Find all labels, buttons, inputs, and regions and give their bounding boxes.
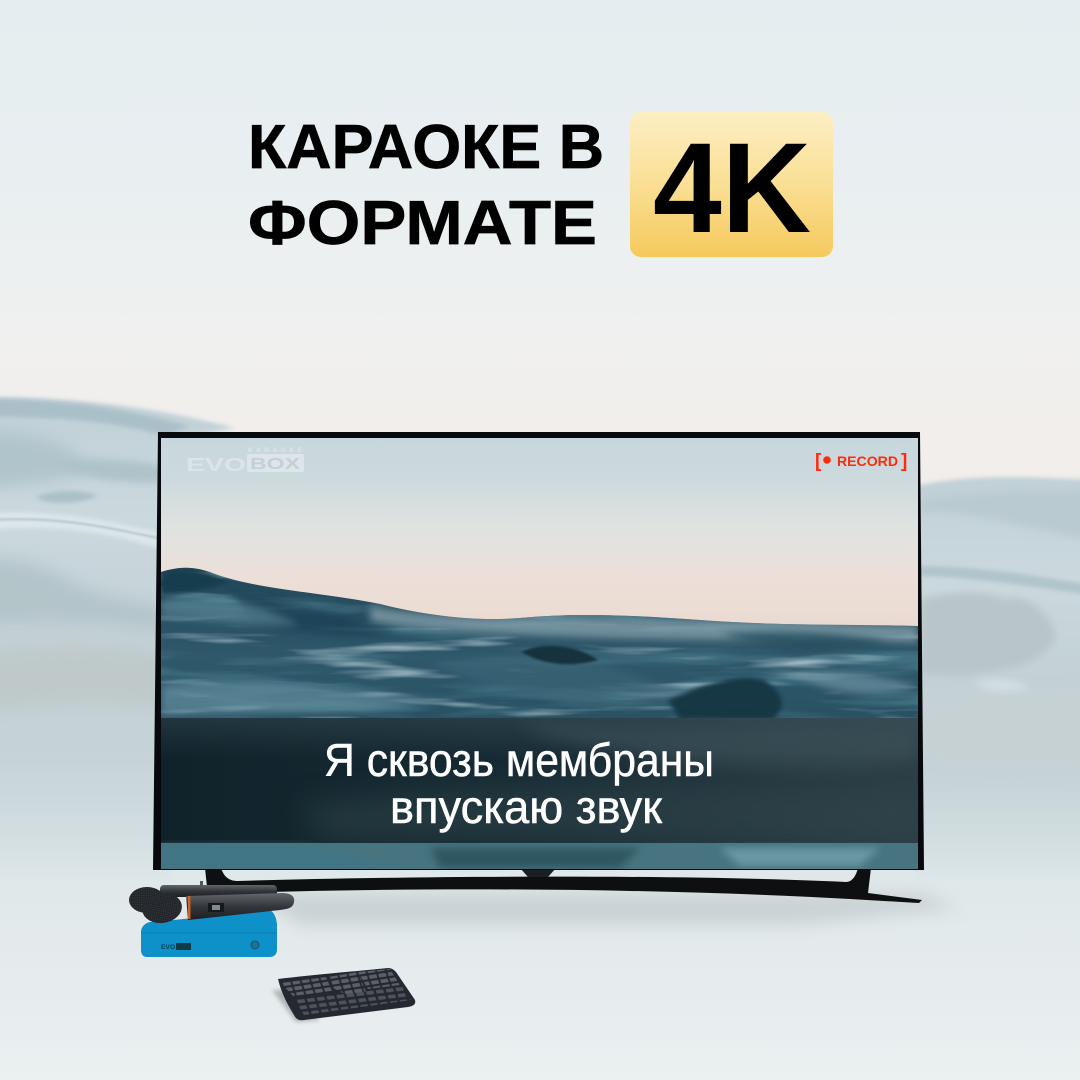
4K gold badge: 4K — [653, 117, 811, 260]
RECORD indicator: RECORD — [837, 453, 898, 469]
TV body — [153, 432, 924, 870]
front microphone — [140, 890, 294, 926]
wave crest, middle rock — [522, 646, 598, 664]
title — [248, 113, 604, 258]
background water, right side — [915, 477, 1080, 880]
blue EVOBOX media player: EVO — [161, 944, 175, 951]
title: КАРАОКЕ В — [248, 113, 604, 182]
title: ФОРМАТЕ — [248, 189, 597, 258]
karaoke lyrics — [324, 734, 714, 833]
TV screen picture — [161, 438, 918, 870]
background water, left side — [0, 397, 235, 880]
RECORD indicator: ] — [901, 451, 907, 472]
TV stand — [205, 868, 922, 903]
screen sky — [161, 438, 918, 638]
antenna — [200, 881, 203, 888]
RECORD indicator: [ — [815, 451, 822, 472]
lyrics band — [161, 718, 918, 843]
microphones — [129, 881, 294, 926]
EVOBOX logo: BOX — [250, 456, 300, 473]
TV bezel — [153, 432, 924, 870]
wave crest, right rock — [668, 677, 782, 720]
lower strip — [161, 843, 918, 869]
screen wave — [161, 568, 918, 718]
karaoke lyrics: Я сквозь мембраны — [324, 734, 714, 786]
karaoke lyrics: впускаю звук — [390, 781, 663, 833]
EVOBOX logo — [186, 447, 304, 475]
blue EVOBOX media player — [141, 909, 277, 957]
EVOBOX logo: KARAOKE — [248, 447, 303, 454]
RECORD indicator — [815, 451, 907, 472]
EVOBOX logo: EVO — [186, 455, 246, 475]
rear microphone — [129, 885, 277, 913]
TV floor shadow — [250, 893, 960, 925]
remote control — [272, 968, 415, 1022]
